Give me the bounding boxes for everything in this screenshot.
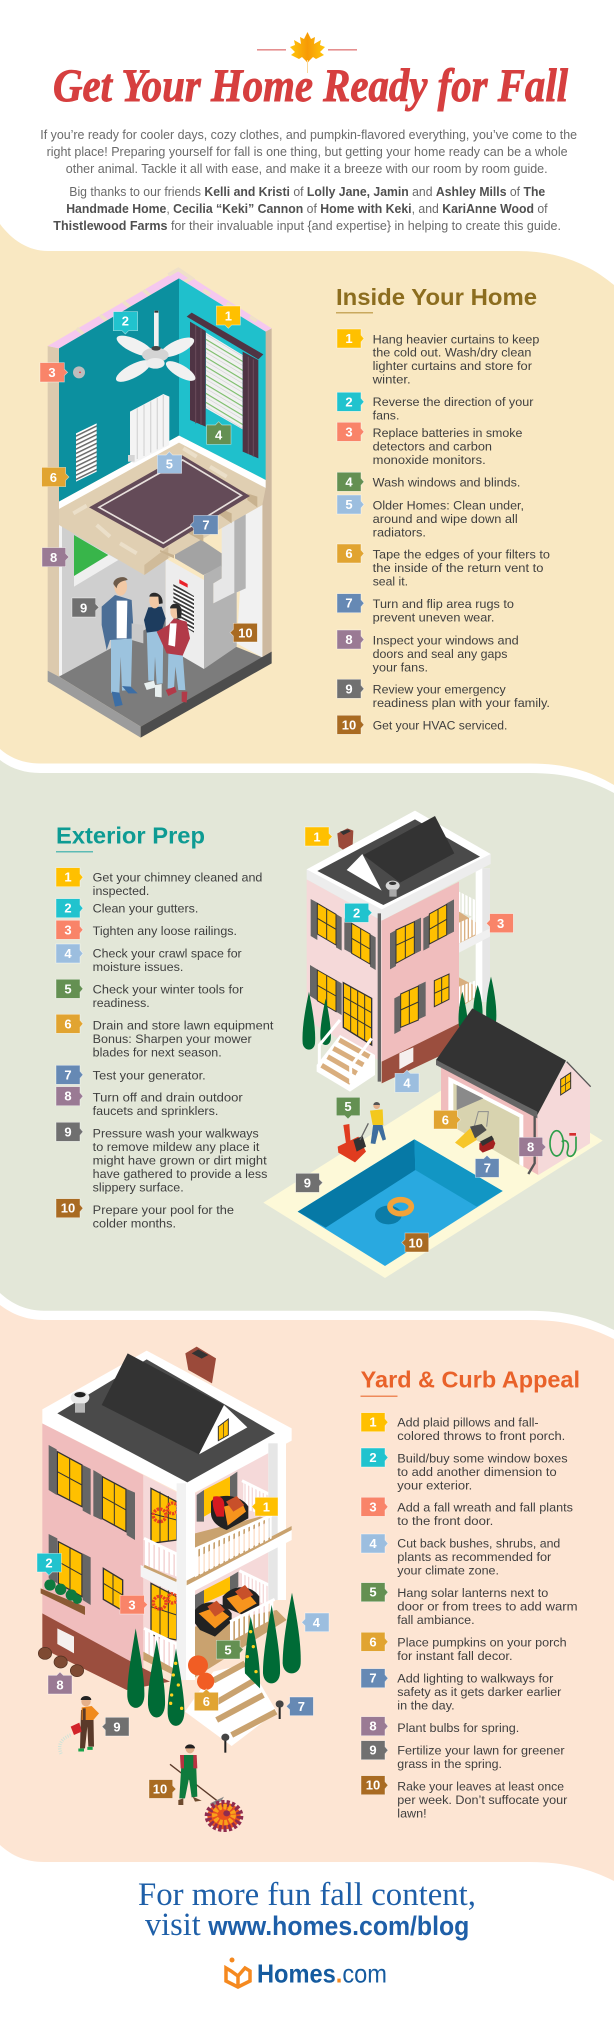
badge 2	[345, 903, 372, 922]
heading: yard and curb appeal: Yard & Curb Appeal	[361, 1367, 580, 1393]
left wall windows	[310, 899, 376, 1045]
patio	[263, 1065, 603, 1278]
list: exterior prep	[56, 868, 274, 1230]
item 9: 9	[369, 1743, 377, 1758]
item 5: fall ambiance.	[397, 1613, 475, 1627]
badge 8	[48, 1672, 72, 1694]
badge 9: 9	[304, 1176, 311, 1191]
badge 3: 3	[48, 365, 56, 380]
badge 7	[190, 515, 218, 534]
badge 5	[216, 1640, 243, 1659]
item 4: 4	[369, 1536, 377, 1551]
window blinds and curtains	[187, 313, 263, 458]
item 4	[337, 472, 520, 491]
chairs	[195, 1496, 259, 1637]
badge 8	[519, 1137, 546, 1156]
item 2: 2	[369, 1450, 377, 1465]
footer call to action: For more fun fall content,	[138, 1877, 476, 1913]
item 10: Get your HVAC serviced.	[373, 718, 507, 732]
badge 1: 1	[313, 829, 321, 844]
item 10: 10	[366, 1778, 380, 1793]
front steps	[317, 1020, 375, 1092]
item 5: Check your winter tools for	[93, 982, 243, 996]
item 6: 6	[345, 546, 353, 561]
badge 9: 9	[113, 1719, 121, 1734]
front railings	[195, 1515, 275, 1642]
item 5: door or from trees to add warm	[397, 1600, 578, 1614]
panel: exterior background	[0, 760, 614, 1330]
item 8: faucets and sprinklers.	[93, 1104, 218, 1118]
item 3: 3	[369, 1499, 377, 1514]
wreaths	[153, 1503, 178, 1609]
item 6: Place pumpkins on your porch	[397, 1636, 567, 1650]
footer call to action: www.homes.com/blog	[207, 1911, 469, 1941]
item 5: 5	[64, 981, 72, 996]
item 7: 7	[345, 596, 353, 611]
badge 5: 5	[344, 1099, 352, 1114]
item 5: readiness.	[93, 996, 150, 1010]
left side railings	[141, 1538, 178, 1677]
item 1: the cold out. Wash/dry clean	[373, 346, 532, 360]
item 6: Bonus: Sharpen your mower	[93, 1032, 252, 1046]
item 10: 10	[61, 1201, 75, 1216]
badge 8: 8	[56, 1677, 64, 1692]
item 10	[361, 1776, 567, 1820]
badge 8	[42, 548, 69, 567]
generator	[479, 1136, 495, 1153]
item 2: 2	[345, 394, 353, 409]
badge 10	[149, 1780, 176, 1798]
item 4	[56, 944, 242, 974]
item 8: 8	[64, 1089, 72, 1104]
heading: exterior prep: Exterior Prep	[56, 822, 205, 848]
badge 3	[486, 914, 513, 933]
badge 1	[216, 306, 240, 328]
right wall windows	[390, 899, 454, 1034]
badge 6: 6	[442, 1112, 449, 1127]
item 1: Add plaid pillows and fall-	[397, 1416, 539, 1430]
badge 3: 3	[497, 916, 504, 931]
illustration: house front with fall decor	[37, 1347, 329, 1829]
trees	[302, 977, 496, 1050]
badge 4	[395, 1070, 419, 1092]
item 1	[361, 1413, 565, 1443]
item 8: Plant bulbs for spring.	[397, 1721, 519, 1735]
item 4: 4	[64, 946, 72, 961]
item 6	[56, 1014, 274, 1060]
panel: inside background	[0, 224, 614, 785]
item 4: plants as recommended for	[397, 1550, 551, 1564]
ducts and HVAC unit	[166, 502, 246, 669]
item 10: 10	[342, 717, 356, 732]
badge 3: 3	[128, 1597, 136, 1612]
item 8: 8	[345, 632, 353, 647]
badge 2: 2	[353, 906, 360, 921]
badge 9	[296, 1173, 323, 1192]
badge 8: 8	[50, 550, 57, 565]
badge 1: 1	[263, 1499, 270, 1514]
footer call to action: visit	[145, 1907, 201, 1943]
list: inside your home	[337, 329, 550, 734]
item 2: 2	[64, 901, 72, 916]
item 10: colder months.	[93, 1216, 176, 1230]
item 7: 7	[64, 1067, 72, 1082]
item 7: Add lighting to walkways for	[397, 1672, 553, 1686]
panel: yard background	[0, 1305, 614, 1881]
chimney	[185, 1347, 216, 1383]
trees with lanterns	[127, 1593, 301, 1726]
person with snowblower	[338, 1102, 386, 1162]
gardener with watering can	[60, 1696, 99, 1755]
columns and balcony slab	[177, 1443, 292, 1680]
item 9	[361, 1741, 565, 1771]
floor planks	[59, 443, 266, 575]
badge 6	[194, 1689, 218, 1711]
badge 7: 7	[202, 518, 210, 533]
item 9: 9	[345, 681, 353, 696]
badge 5: 5	[166, 456, 173, 471]
intro text	[40, 128, 577, 176]
badge 9	[72, 598, 99, 617]
porch back walls, windows and floors	[193, 1452, 287, 1678]
item 6	[337, 544, 550, 588]
item 7: Turn and flip area rugs to	[373, 597, 514, 611]
badge 7: 7	[298, 1699, 305, 1714]
item 7: prevent uneven wear.	[373, 610, 494, 624]
item 2: fans.	[373, 408, 399, 422]
badge 9	[102, 1717, 129, 1736]
item 3: to the front door.	[397, 1514, 493, 1528]
item 10: per week. Don’t suffocate your	[397, 1793, 567, 1807]
item 6: blades for next season.	[93, 1046, 222, 1060]
icon: ceiling fan	[113, 311, 198, 386]
badge 10: 10	[408, 1235, 423, 1250]
item 1: 1	[345, 331, 353, 346]
back railings	[239, 1481, 269, 1607]
item 6: Drain and store lawn equipment	[93, 1019, 274, 1033]
item 9	[56, 1122, 267, 1194]
item 3: 3	[64, 922, 72, 937]
window box	[41, 1579, 85, 1615]
item 2	[56, 899, 198, 918]
badge 4	[207, 422, 231, 444]
badge 4: 4	[215, 428, 223, 443]
item 9: slippery surface.	[93, 1180, 184, 1194]
item 9: readiness plan with your family.	[373, 696, 550, 710]
intro text: If you’re ready for cooler days, cozy clothes, and pumpkin-flavored everything, you’ve come to the	[40, 128, 577, 142]
garage	[436, 1008, 591, 1175]
item 7: 7	[369, 1671, 377, 1686]
badge 6: 6	[203, 1694, 210, 1709]
porch columns and railings	[459, 868, 490, 1008]
item 3: Tighten any loose railings.	[93, 924, 237, 938]
pumpkins	[188, 1655, 214, 1690]
item 2	[337, 392, 533, 422]
badge 10: 10	[238, 626, 253, 641]
lawn mower	[455, 1112, 488, 1148]
badge 7: 7	[484, 1161, 491, 1176]
item 1: winter.	[372, 373, 411, 387]
item 5: radiators.	[373, 525, 426, 539]
item 9	[337, 679, 550, 710]
badge 4: 4	[313, 1615, 321, 1630]
item 3	[56, 920, 237, 939]
return vent	[76, 423, 97, 482]
icon: smoke detector	[73, 366, 85, 378]
badge 3	[40, 363, 68, 382]
badge 10	[230, 623, 257, 642]
item 5	[56, 979, 243, 1010]
item 4: Cut back bushes, shrubs, and	[397, 1537, 560, 1551]
item 10: lawn!	[397, 1806, 427, 1820]
bulbs in soil	[38, 1647, 84, 1677]
thanks text: Handmade Home, Cecilia “Keki” Cannon of Home with Keki, and KariAnne Wood of	[66, 202, 548, 216]
item 5	[337, 495, 524, 539]
item 8	[361, 1717, 519, 1736]
item 7: in the day.	[397, 1698, 455, 1712]
item 6	[361, 1632, 567, 1663]
item 10: Rake your leaves at least once	[397, 1780, 564, 1794]
item 6: 6	[369, 1634, 377, 1649]
radiator	[128, 394, 169, 463]
badge 2: 2	[45, 1555, 53, 1570]
badge 6	[42, 467, 69, 487]
illustration: house cutaway interior	[40, 269, 272, 738]
item 4	[361, 1534, 560, 1578]
hose reel	[550, 1131, 576, 1156]
item 9: might have grown or dirt might	[93, 1154, 267, 1168]
roof	[307, 811, 491, 921]
item 9: Pressure wash your walkways	[93, 1127, 259, 1141]
badge 2	[37, 1553, 61, 1575]
item 8: Inspect your windows and	[373, 633, 519, 647]
outer frame and insulation	[48, 269, 272, 677]
badge 3	[120, 1595, 148, 1614]
item 8	[56, 1087, 243, 1118]
teal right wall	[179, 278, 266, 480]
item 5: Hang solar lanterns next to	[397, 1586, 548, 1600]
pool	[298, 1139, 503, 1266]
item 5: 5	[369, 1585, 377, 1600]
list: yard and curb appeal	[361, 1413, 578, 1820]
footer call to action	[138, 1877, 476, 1943]
item 3: Add a fall wreath and fall plants	[397, 1501, 573, 1515]
intro text: right place! Preparing yourself for fall is one thing, but getting your home ready can be a whole	[47, 145, 568, 159]
chimney	[337, 828, 353, 850]
house walls	[307, 879, 459, 1083]
item 9: have gathered to provide a less	[93, 1167, 267, 1181]
item 3: 3	[345, 424, 353, 439]
leaf pile	[207, 1803, 241, 1829]
item 7	[361, 1669, 561, 1712]
illustration: exterior house with garage and pool	[263, 811, 603, 1278]
icon: house logo	[226, 1958, 250, 1987]
item 8	[337, 630, 519, 674]
item 1: lighter curtains and store for	[373, 359, 532, 373]
badge 7	[475, 1155, 499, 1177]
badge 4	[302, 1613, 329, 1632]
rug	[89, 455, 250, 548]
item 7	[337, 594, 514, 624]
badge 1: 1	[225, 308, 232, 323]
badge 2: 2	[122, 314, 129, 329]
item 7: safety as it gets darker earlier	[397, 1685, 561, 1699]
item 6: for instant fall decor.	[397, 1649, 513, 1663]
item 4: moisture issues.	[93, 960, 183, 974]
item 1: Get your chimney cleaned and	[93, 871, 263, 885]
item 1: Hang heavier curtains to keep	[373, 332, 540, 346]
badge 9: 9	[80, 600, 87, 615]
logo: Homes.com: Homes.com	[257, 1959, 387, 1989]
item 7	[56, 1065, 206, 1084]
item 3: monoxide monitors.	[373, 453, 486, 467]
intro text: other animal. Tackle it all with ease, and make it a breeze with our room by room guide.	[66, 162, 548, 176]
item 2: Clean your gutters.	[93, 902, 198, 916]
item 2	[361, 1448, 568, 1492]
badge 10	[402, 1233, 429, 1252]
badge 6	[434, 1110, 461, 1129]
item 1: colored throws to front porch.	[397, 1429, 565, 1443]
item 5: around and wipe down all	[373, 512, 518, 526]
item 4: Wash windows and blinds.	[373, 476, 520, 490]
thanks text: Thistlewood Farms for their invaluable input {and expertise} in helping to create this guide.	[53, 219, 561, 233]
item 9: to remove mildew any place it	[93, 1140, 260, 1154]
badge 2	[113, 312, 138, 334]
teal left wall	[59, 278, 179, 502]
item 1	[337, 329, 540, 387]
item 9: Review your emergency	[373, 682, 507, 696]
front steps	[185, 1663, 277, 1746]
item 4: your climate zone.	[397, 1564, 499, 1578]
item 2: your exterior.	[397, 1478, 472, 1492]
item 10	[337, 715, 507, 734]
badge 5	[157, 452, 182, 473]
heading: inside your home: Inside Your Home	[336, 284, 537, 310]
lower room	[48, 502, 272, 738]
walkway lights	[221, 1700, 284, 1753]
item 8: Turn off and drain outdoor	[93, 1091, 243, 1105]
badge 5	[336, 1097, 360, 1119]
item 4: Check your crawl space for	[93, 947, 242, 961]
item 9: 9	[64, 1124, 72, 1139]
item 7: Test your generator.	[93, 1068, 206, 1082]
item 2: Reverse the direction of your	[373, 395, 533, 409]
badge 1	[305, 827, 332, 846]
item 8: 8	[369, 1719, 377, 1734]
item 8: doors and seal any gaps	[373, 647, 507, 661]
item 3: detectors and carbon	[373, 440, 492, 454]
item 5: Older Homes: Clean under,	[373, 498, 524, 512]
item 10: Prepare your pool for the	[93, 1203, 234, 1217]
item 10	[56, 1199, 234, 1230]
side windows	[49, 1445, 177, 1640]
item 1	[56, 868, 263, 898]
badge 1	[252, 1497, 278, 1516]
item 2: Build/buy some window boxes	[397, 1451, 568, 1465]
item 3	[361, 1497, 573, 1528]
item 6: seal it.	[373, 574, 408, 588]
roof	[42, 1351, 292, 1497]
item 5	[361, 1583, 578, 1627]
badge 4: 4	[403, 1076, 411, 1091]
person raking leaves	[170, 1744, 224, 1806]
item 1: 1	[369, 1415, 377, 1430]
thanks text: Big thanks to our friends Kelli and Kristi of Lolly Jane, Jamin and Ashley Mills of The	[69, 185, 545, 199]
item 9: Fertilize your lawn for greener	[397, 1744, 565, 1758]
badge 5: 5	[224, 1642, 232, 1657]
badge 7	[286, 1697, 313, 1716]
item 3	[337, 422, 523, 467]
item 1: 1	[64, 870, 72, 885]
downspout	[374, 913, 384, 1082]
icon: maple leaf with rules	[257, 32, 357, 73]
badge 8: 8	[527, 1140, 534, 1155]
item 2: to add another dimension to	[397, 1465, 557, 1479]
item 1: inspected.	[93, 884, 149, 898]
item 6: the inside of the return vent to	[373, 561, 544, 575]
thanks text	[53, 185, 561, 233]
item 8: your fans.	[373, 660, 428, 674]
item 6: Tape the edges of your filters to	[373, 548, 550, 562]
baseboard	[59, 436, 266, 509]
badge 10: 10	[153, 1782, 167, 1797]
item 4: 4	[345, 474, 353, 489]
item 3: Replace batteries in smoke	[373, 426, 523, 440]
side wall and foundation	[42, 1423, 178, 1690]
item 9: grass in the spring.	[397, 1757, 502, 1771]
badge 6: 6	[50, 470, 57, 485]
item 6: 6	[64, 1016, 72, 1031]
item 5: 5	[345, 497, 353, 512]
people	[102, 577, 190, 707]
